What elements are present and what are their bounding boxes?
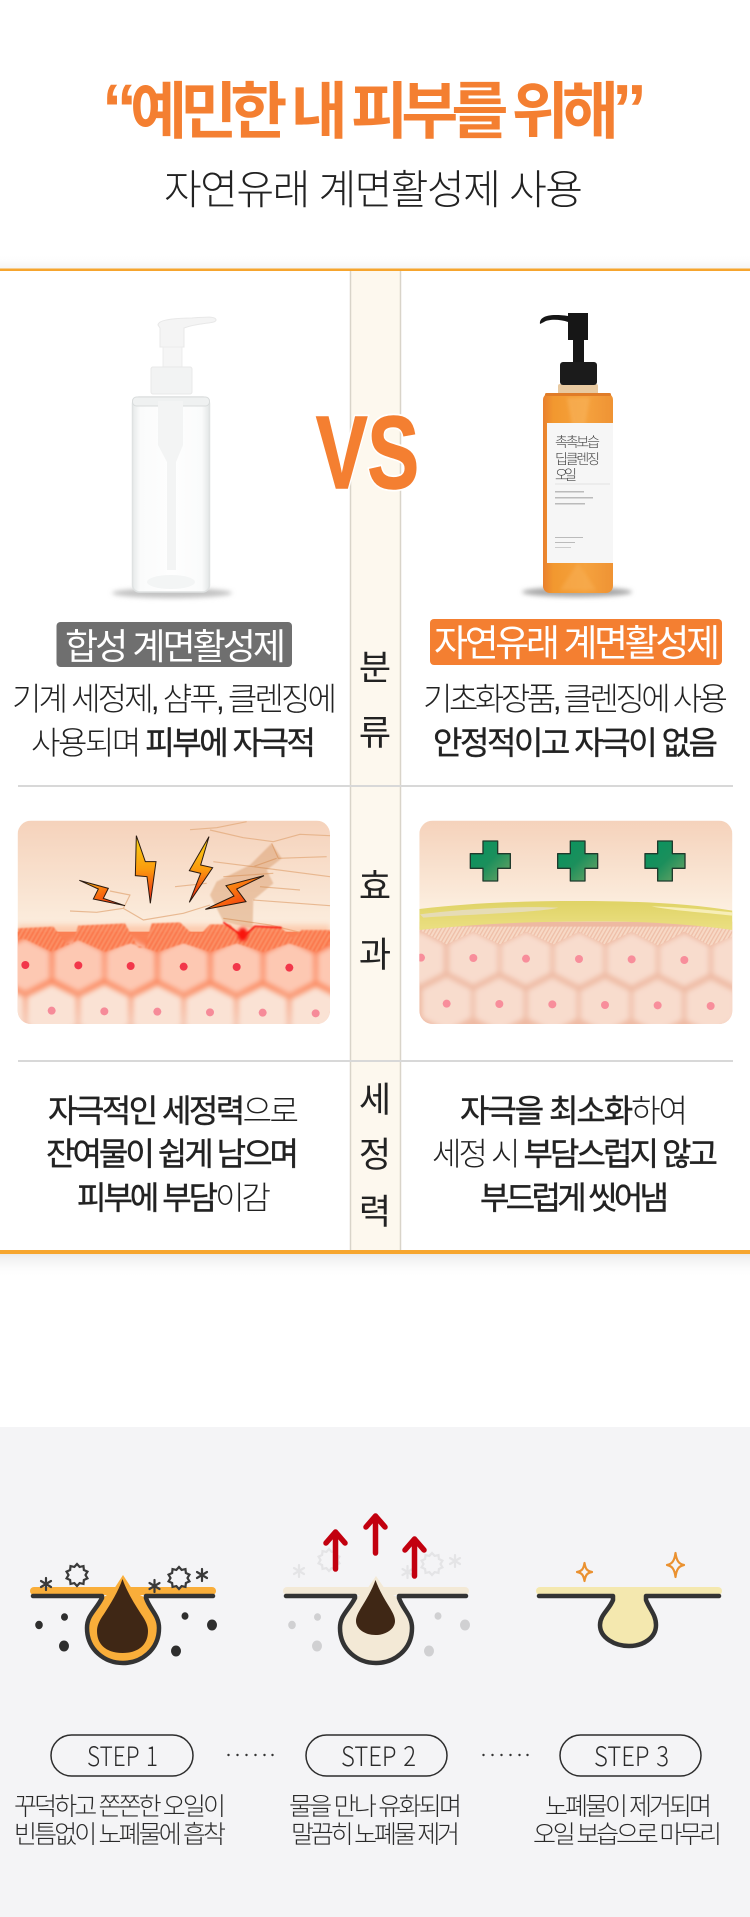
pill: step 1 — [51, 1735, 193, 1776]
text: synthetic cleansing power — [46, 1093, 299, 1216]
text: synthetic cleansing power: 피부에 부담이감 — [77, 1180, 271, 1216]
text: step 3 description: 오일 보습으로 마무리 — [533, 1821, 722, 1849]
step 3 — [533, 1735, 722, 1849]
text: step 3 description: 노폐물이 제거되며 — [545, 1793, 712, 1821]
bottle label — [547, 423, 613, 563]
skin cracks — [70, 822, 330, 932]
text: synthetic cleansing power: 자극적인 세정력으로 — [48, 1093, 299, 1129]
subtitle: 자연유래 계면활성제 사용 — [164, 167, 583, 213]
product: empty clear pump bottle — [112, 317, 232, 598]
text: synthetic classification: 사용되며 피부에 자극적 — [31, 725, 316, 761]
center column — [350, 270, 400, 1251]
skin surface band — [18, 922, 330, 952]
label: cleansing power: 세 — [359, 1081, 391, 1120]
title: “예민한 내 피부를 위해” — [102, 70, 647, 148]
lightning bolts — [79, 836, 264, 909]
cells upper row — [1, 938, 367, 994]
step 2 — [289, 1735, 462, 1849]
text: natural classification: 기초화장품, 클렌징에 사용 — [423, 681, 728, 717]
bottom rule — [0, 1250, 750, 1254]
cells lower row — [420, 976, 732, 1024]
label: effect: 효 — [359, 868, 391, 907]
product: orange cleansing oil bottle: 촉촉보습 — [555, 434, 600, 450]
arrows: rising — [326, 1516, 424, 1576]
label: effect — [359, 868, 391, 975]
label: classification: 분 — [359, 649, 391, 688]
dots: between step 2 and 3 — [482, 1754, 529, 1756]
cells upper row — [395, 932, 750, 987]
label: effect: 과 — [359, 936, 391, 975]
badge: natural surfactant: 자연유래 계면활성제 — [434, 623, 720, 664]
VS: VS — [316, 395, 419, 510]
pump — [540, 313, 588, 362]
text: step 2 description — [289, 1793, 462, 1849]
product: orange cleansing oil bottle: 오일 — [555, 467, 577, 483]
label: cleansing power: 정 — [359, 1136, 391, 1175]
comparison table — [0, 254, 750, 1278]
label: classification: 류 — [359, 714, 391, 753]
illustration: irritated skin — [18, 820, 330, 1024]
pill: step 2 — [306, 1735, 447, 1776]
text: natural cleansing power: 자극을 최소화하여 — [460, 1093, 688, 1129]
icon: green crosses — [470, 841, 685, 881]
text: synthetic cleansing power: 잔여물이 쉽게 남으며 — [46, 1136, 299, 1172]
label: cleansing power: 력 — [359, 1193, 391, 1232]
oil layer — [419, 901, 732, 930]
text: step 2 description: 말끔히 노폐물 제거 — [291, 1821, 460, 1849]
pill: step 1: STEP 1 — [87, 1735, 158, 1774]
VS: VS — [316, 395, 419, 510]
illustration: calm skin with protective layer — [419, 820, 732, 1024]
text: natural classification — [423, 681, 728, 761]
top rule — [0, 268, 750, 271]
text: step 2 description: 물을 만나 유화되며 — [289, 1793, 462, 1821]
text: step 1 description: 꾸덕하고 쫀쫀한 오일이 — [14, 1793, 226, 1821]
icon: step 1 pore filled with oil — [30, 1564, 217, 1663]
pill: step 2: STEP 2 — [341, 1735, 416, 1774]
text: natural classification: 안정적이고 자극이 없음 — [433, 725, 718, 761]
text: synthetic classification — [12, 681, 337, 761]
text: natural cleansing power: 세정 시 부담스럽지 않고 — [432, 1136, 718, 1172]
dots: between step 1 and 2 — [227, 1754, 274, 1756]
step 1 — [14, 1735, 226, 1849]
badge: synthetic surfactant: 합성 계면활성제 — [65, 626, 286, 667]
text: step 1 description — [14, 1793, 226, 1849]
product: orange cleansing oil bottle — [522, 313, 632, 597]
text: step 3 description — [533, 1793, 722, 1849]
icon: step 3 clean pore with sparkles — [536, 1553, 722, 1646]
text: natural cleansing power — [432, 1093, 718, 1216]
text: step 1 description: 빈틈없이 노폐물에 흡착 — [14, 1821, 226, 1849]
text: synthetic classification: 기계 세정제, 샴푸, 클렌징에 — [12, 681, 337, 717]
icon: step 2 oil emulsifying — [283, 1516, 470, 1663]
cell nuclei — [417, 954, 715, 1010]
product: orange cleansing oil bottle: 딥클렌징 — [555, 451, 600, 467]
glow above skin — [18, 925, 330, 942]
cells lower row — [18, 982, 330, 1024]
label: cleansing power — [359, 1081, 391, 1232]
panel: steps — [0, 1427, 750, 1917]
pill: step 3 — [560, 1735, 701, 1776]
label: classification — [359, 649, 391, 753]
pill: step 3: STEP 3 — [594, 1735, 669, 1774]
hatching under oil layer — [419, 927, 732, 946]
cell nuclei — [21, 961, 293, 972]
text: natural cleansing power: 부드럽게 씻어냄 — [480, 1180, 669, 1216]
